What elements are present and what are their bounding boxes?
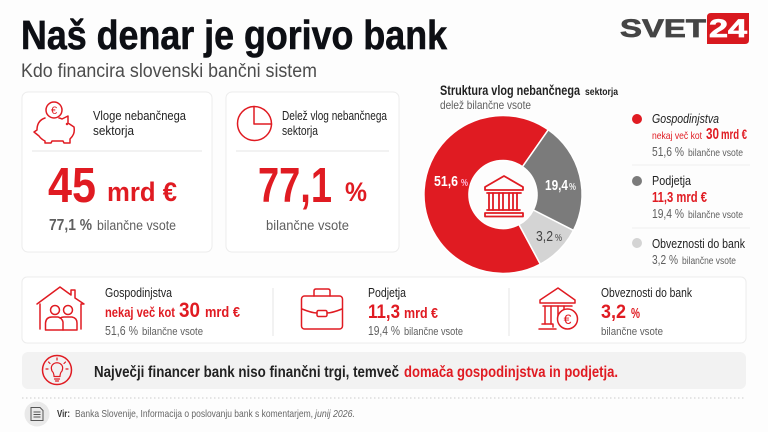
legend: Podjetja: [632, 173, 743, 221]
legend: Gospodinjstva: Gospodinjstva: [652, 111, 719, 126]
item: Obveznosti do bank: %: [631, 305, 640, 322]
legend: Obveznosti do bank: bilančne vsote: [682, 256, 736, 267]
label 51,6 %: %: [461, 178, 468, 189]
item: Podjetja: 19,4 %: [368, 323, 400, 338]
legend: Gospodinjstva: nekaj več kot: [652, 130, 702, 142]
slice: Gospodinjstva 51,6 %: [424, 115, 548, 273]
legend: [632, 111, 750, 267]
subtitle: Kdo financira slovenski bančni sistem: [21, 61, 317, 82]
legend: Gospodinjstva: mrd €: [721, 127, 747, 142]
source: [24, 402, 355, 426]
callout: Največji financer bank niso finančni trgi, temveč: [94, 364, 399, 381]
item: Gospodinjstva: 51,6 %: [105, 323, 138, 338]
item: Gospodinjstva: bilančne vsote: [142, 326, 203, 338]
item: Podjetja: Podjetja: [368, 285, 407, 300]
label 3,2 %: %: [555, 233, 562, 244]
label 3,2 %: 3,2: [536, 229, 553, 245]
panel: deposits amount: [22, 92, 212, 252]
label 19,4 %: %: [569, 182, 576, 193]
donut chart: [424, 115, 582, 273]
legend: Obveznosti do bank: Obveznosti do bank: [652, 236, 745, 251]
panel: deposits share: sektorja: [282, 123, 319, 138]
icon: house with family: [37, 287, 84, 330]
item: Podjetja: 11,3: [368, 302, 400, 323]
panel: deposits share: bilančne vsote: [266, 217, 349, 233]
panel: deposits amount: 77,1 %: [49, 217, 92, 234]
item: Gospodinjstva: Gospodinjstva: [105, 285, 173, 300]
legend: Gospodinjstva: 30: [706, 126, 719, 143]
panel: deposits share: Delež vlog nebančnega: [282, 108, 388, 123]
item: Gospodinjstva: [105, 285, 241, 338]
item: Gospodinjstva: nekaj več kot: [105, 304, 175, 320]
item: Gospodinjstva: mrd €: [205, 304, 241, 321]
item: Podjetja: bilančne vsote: [404, 326, 463, 338]
legend: Podjetja: 19,4 %: [652, 206, 684, 221]
source: junij 2026.: [313, 408, 355, 420]
legend: Gospodinjstva: 51,6 %: [652, 144, 684, 159]
legend: Podjetja: 11,3 mrd €: [652, 189, 707, 206]
icon: light bulb: [42, 356, 72, 384]
panel: deposits share: 77,1: [258, 159, 332, 213]
icon: piggy bank: [34, 102, 74, 143]
item: Obveznosti do bank: [601, 285, 692, 338]
label 19,4 %: 19,4: [545, 178, 568, 194]
icon: pie chart: [238, 106, 272, 140]
item: Obveznosti do bank: 3,2: [601, 302, 626, 323]
legend: Podjetja: Podjetja: [652, 173, 692, 188]
panel: deposits amount: 45: [48, 159, 96, 213]
icon: bank with euro: [539, 288, 578, 329]
panel: breakdown row: [22, 277, 746, 343]
legend: Gospodinjstva: [632, 111, 747, 159]
icon: piggy bank: €: [51, 105, 57, 117]
panel: deposits amount: mrd €: [107, 177, 177, 207]
legend: Obveznosti do bank: [632, 236, 745, 267]
slice: Obveznosti 3,2 %: [519, 210, 574, 264]
logo: SVET24: [620, 13, 749, 44]
source: Vir:: [57, 408, 70, 420]
icon: document: [24, 402, 50, 426]
item: Podjetja: mrd €: [404, 305, 439, 322]
panel: deposits share: %: [345, 177, 367, 207]
item: Obveznosti do bank: bilančne vsote: [601, 326, 663, 338]
legend: Obveznosti do bank: 3,2 %: [652, 252, 678, 267]
label 51,6 %: 51,6: [434, 174, 458, 190]
icon: bank: [485, 176, 523, 216]
title: Naš denar je gorivo bank: [21, 12, 447, 58]
callout: domača gospodinjstva in podjetja.: [404, 364, 618, 381]
panel: deposits amount: bilančne vsote: [97, 218, 176, 233]
panel: deposits amount: Vloge nebančnega: [93, 108, 187, 123]
logo: SVET24: 24: [709, 15, 747, 43]
legend: Gospodinjstva: bilančne vsote: [688, 148, 743, 159]
chart heading: Struktura vlog nebančnega: [440, 83, 580, 98]
legend: Podjetja: bilančne vsote: [688, 210, 743, 221]
chart heading: [440, 83, 618, 112]
item: Podjetja: [368, 285, 463, 338]
icon: bank with euro: €: [564, 311, 572, 327]
panel: deposits share: [226, 92, 399, 252]
icon: briefcase: [302, 289, 342, 329]
item: Obveznosti do bank: Obveznosti do bank: [601, 285, 692, 300]
chart heading: sektorja: [585, 86, 618, 98]
logo: SVET24: SVET: [620, 15, 706, 43]
slice: Podjetja 19,4 %: [522, 130, 582, 230]
chart heading: delež bilančne vsote: [440, 98, 531, 112]
callout: [22, 352, 746, 389]
item: Gospodinjstva: 30: [179, 299, 200, 322]
panel: deposits amount: sektorja: [93, 123, 135, 138]
source: Banka Slovenije, Informacija o poslovanju bank s komentarjem,: [75, 408, 313, 420]
